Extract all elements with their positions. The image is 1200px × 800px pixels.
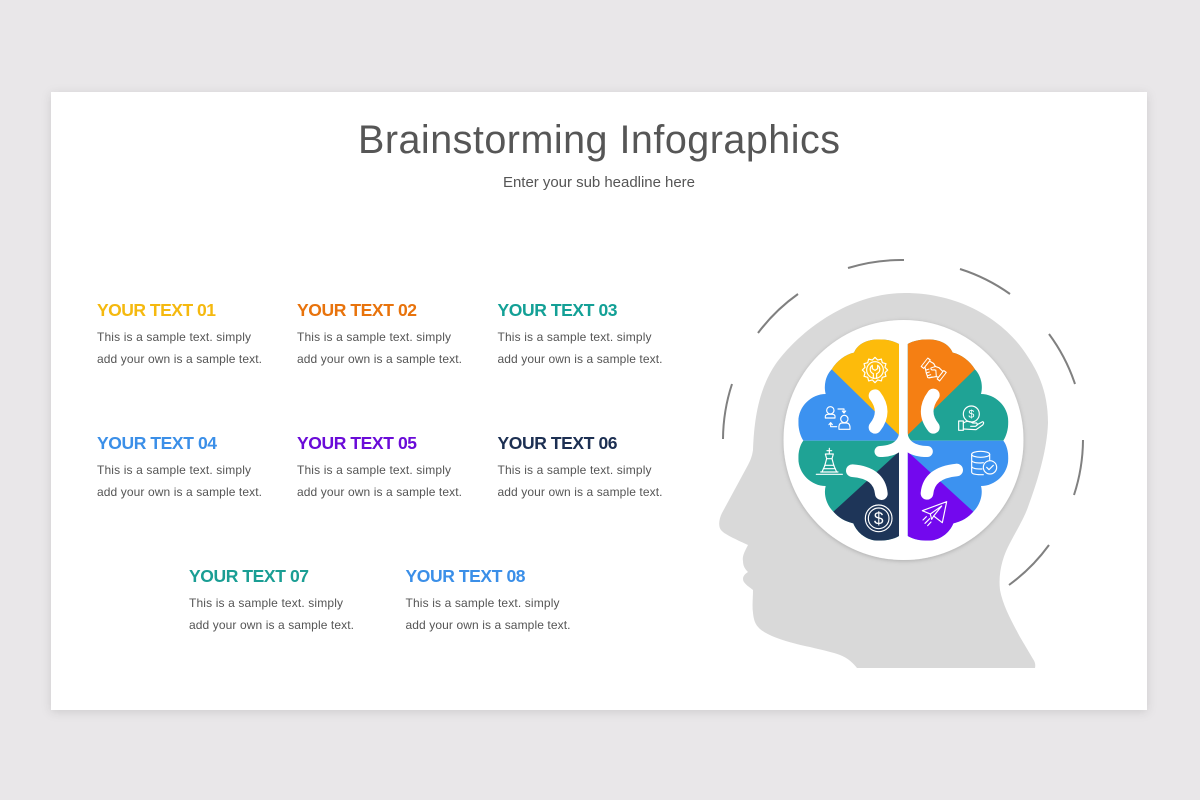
text block 02: YOUR TEXT 02 — [297, 300, 417, 320]
icon: dollar coin — [865, 505, 892, 532]
white brain folds — [852, 395, 957, 494]
text block 02: add your own is a sample text. — [297, 352, 462, 366]
text block 06: This is a sample text. simply — [498, 463, 652, 477]
icon: gear with wrench — [862, 357, 888, 383]
text block 05: This is a sample text. simply — [297, 463, 451, 477]
dollar signs on coin icons: $ — [968, 408, 974, 420]
text block 01: add your own is a sample text. — [97, 352, 262, 366]
icon: database with check — [972, 451, 997, 475]
text block 04 — [97, 433, 262, 499]
text block 03: This is a sample text. simply — [498, 330, 652, 344]
text block 02: This is a sample text. simply — [297, 330, 451, 344]
text block 01: YOUR TEXT 01 — [97, 300, 216, 320]
text block 07: This is a sample text. simply — [189, 596, 343, 610]
text block 08 — [406, 566, 570, 632]
head silhouette — [719, 293, 1048, 668]
text block 04: add your own is a sample text. — [97, 485, 262, 499]
text block 05: YOUR TEXT 05 — [297, 433, 417, 453]
text block 06: YOUR TEXT 06 — [498, 433, 618, 453]
text block 04: YOUR TEXT 04 — [97, 433, 217, 453]
text block 08: add your own is a sample text. — [406, 618, 570, 632]
text block 02 — [297, 300, 462, 366]
brain diagram — [793, 333, 1013, 547]
text block 03 — [498, 300, 662, 366]
text block 07: add your own is a sample text. — [189, 618, 354, 632]
slide card — [51, 92, 1147, 710]
right brain half — [908, 339, 1008, 541]
text block 05 — [297, 433, 462, 499]
text block 03: add your own is a sample text. — [498, 352, 662, 366]
text block 07: YOUR TEXT 07 — [189, 566, 309, 586]
central white stem — [874, 433, 933, 457]
icon: hand holding coin — [959, 406, 984, 430]
icon: people exchange — [825, 407, 850, 429]
subtitle: Enter your sub headline here — [503, 174, 695, 191]
icon: paper plane — [922, 502, 947, 526]
icon: handshake — [918, 358, 946, 385]
text block 01 — [97, 300, 262, 366]
text block 04: This is a sample text. simply — [97, 463, 251, 477]
text block 06 — [498, 433, 662, 499]
text block 08: This is a sample text. simply — [406, 596, 560, 610]
dollar signs on coin icons — [874, 408, 974, 529]
left brain half — [798, 339, 899, 541]
text block 03: YOUR TEXT 03 — [498, 300, 618, 320]
text block 08: YOUR TEXT 08 — [406, 566, 526, 586]
white circle — [784, 320, 1024, 560]
text block 07 — [189, 566, 354, 632]
title: Brainstorming Infographics — [358, 118, 840, 162]
text block 06: add your own is a sample text. — [498, 485, 662, 499]
text block 05: add your own is a sample text. — [297, 485, 462, 499]
dollar signs on coin icons: $ — [874, 509, 884, 529]
dashed arcs around the head — [723, 260, 1083, 585]
icon: chess piece — [816, 448, 842, 474]
text block 01: This is a sample text. simply — [97, 330, 251, 344]
